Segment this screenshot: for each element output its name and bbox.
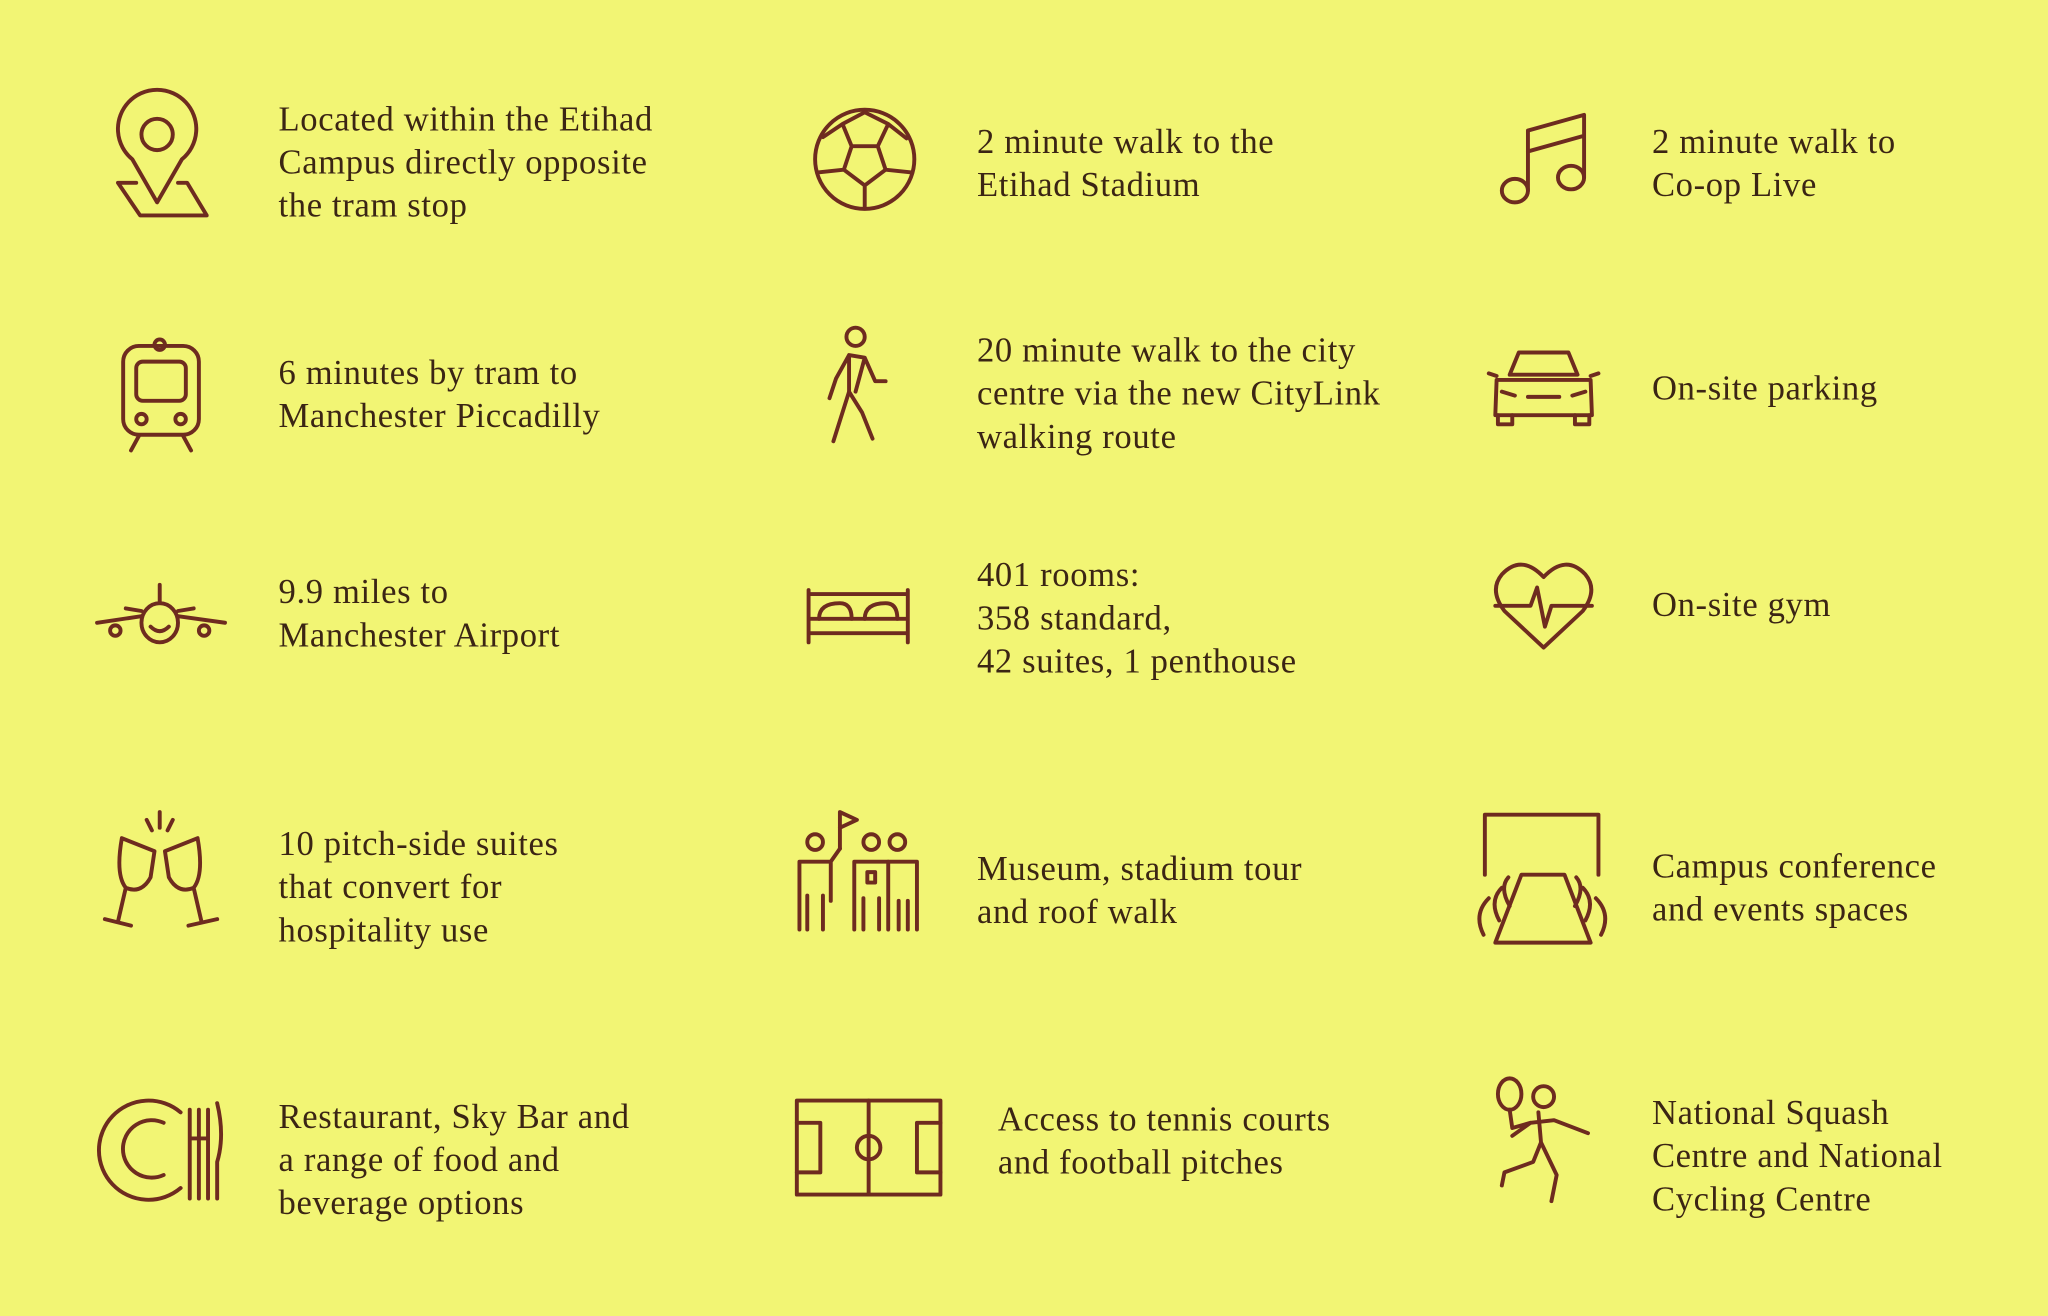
text: restaurant: beverage options <box>279 1184 524 1222</box>
text: rooms <box>977 556 1297 680</box>
text: museum: and roof walk <box>977 893 1178 931</box>
text: suites: hospitality use <box>279 911 489 949</box>
icon: plate and cutlery <box>99 1101 221 1200</box>
icon: clinking glasses <box>105 812 217 926</box>
text: location: Campus directly opposite <box>279 144 648 182</box>
text: suites: that convert for <box>279 868 502 906</box>
text: pitches <box>998 1101 1331 1182</box>
text: rooms: 401 rooms: <box>977 556 1140 594</box>
text: co-op live: 2 minute walk to <box>1652 123 1896 161</box>
text: tram: 6 minutes by tram to <box>279 354 578 392</box>
text: pitches: Access to tennis courts <box>998 1101 1331 1139</box>
icon: car <box>1489 352 1598 424</box>
text: restaurant <box>279 1098 630 1222</box>
text: suites <box>279 825 559 949</box>
text: airport <box>279 573 560 654</box>
text: restaurant: Restaurant, Sky Bar and <box>279 1098 630 1136</box>
icon: squash player <box>1498 1078 1588 1201</box>
text: location <box>279 101 653 225</box>
text: conference: and events spaces <box>1652 890 1909 928</box>
text: parking: On-site parking <box>1652 369 1878 407</box>
text: location: Located within the Etihad <box>279 101 653 139</box>
icon: conference <box>1479 815 1605 943</box>
text: squash <box>1652 1094 1943 1218</box>
icon: people tour <box>799 812 917 930</box>
icon: heart <box>1495 565 1592 648</box>
text: airport: 9.9 miles to <box>279 573 449 611</box>
text: walk <box>977 332 1381 456</box>
text: restaurant: a range of food and <box>279 1141 560 1179</box>
text: pitches: and football pitches <box>998 1144 1284 1182</box>
icon: location pin <box>118 90 207 215</box>
text: conference <box>1652 847 1937 928</box>
text: suites: 10 pitch-side suites <box>279 825 559 863</box>
icon: tram <box>123 339 199 450</box>
text: rooms: 42 suites, 1 penthouse <box>977 642 1297 680</box>
text: co-op live <box>1652 123 1896 204</box>
text: walk: walking route <box>977 418 1177 456</box>
text: squash: Cycling Centre <box>1652 1180 1871 1218</box>
text: conference: Campus conference <box>1652 847 1937 885</box>
icon: football <box>815 110 914 209</box>
text: walk: 20 minute walk to the city <box>977 332 1356 370</box>
text: walk: centre via the new CityLink <box>977 375 1381 413</box>
icon: walking person <box>829 328 886 441</box>
text: stadium <box>977 123 1274 204</box>
text: tram: Manchester Piccadilly <box>279 397 601 435</box>
icon: football pitch <box>797 1101 940 1195</box>
icon: plane <box>97 585 225 642</box>
text: museum: Museum, stadium tour <box>977 850 1302 888</box>
text: squash: National Squash <box>1652 1094 1889 1132</box>
text: rooms: 358 standard, <box>977 599 1172 637</box>
text: co-op live: Co-op Live <box>1652 166 1817 204</box>
text: gym: On-site gym <box>1652 586 1831 624</box>
text: museum <box>977 850 1302 931</box>
text: tram <box>279 354 601 435</box>
text: location: the tram stop <box>279 187 468 225</box>
icon: music note <box>1502 115 1584 202</box>
text: stadium: Etihad Stadium <box>977 166 1200 204</box>
icon: bed <box>809 590 908 642</box>
text: airport: Manchester Airport <box>279 616 560 654</box>
text: squash: Centre and National <box>1652 1137 1943 1175</box>
text: stadium: 2 minute walk to the <box>977 123 1274 161</box>
